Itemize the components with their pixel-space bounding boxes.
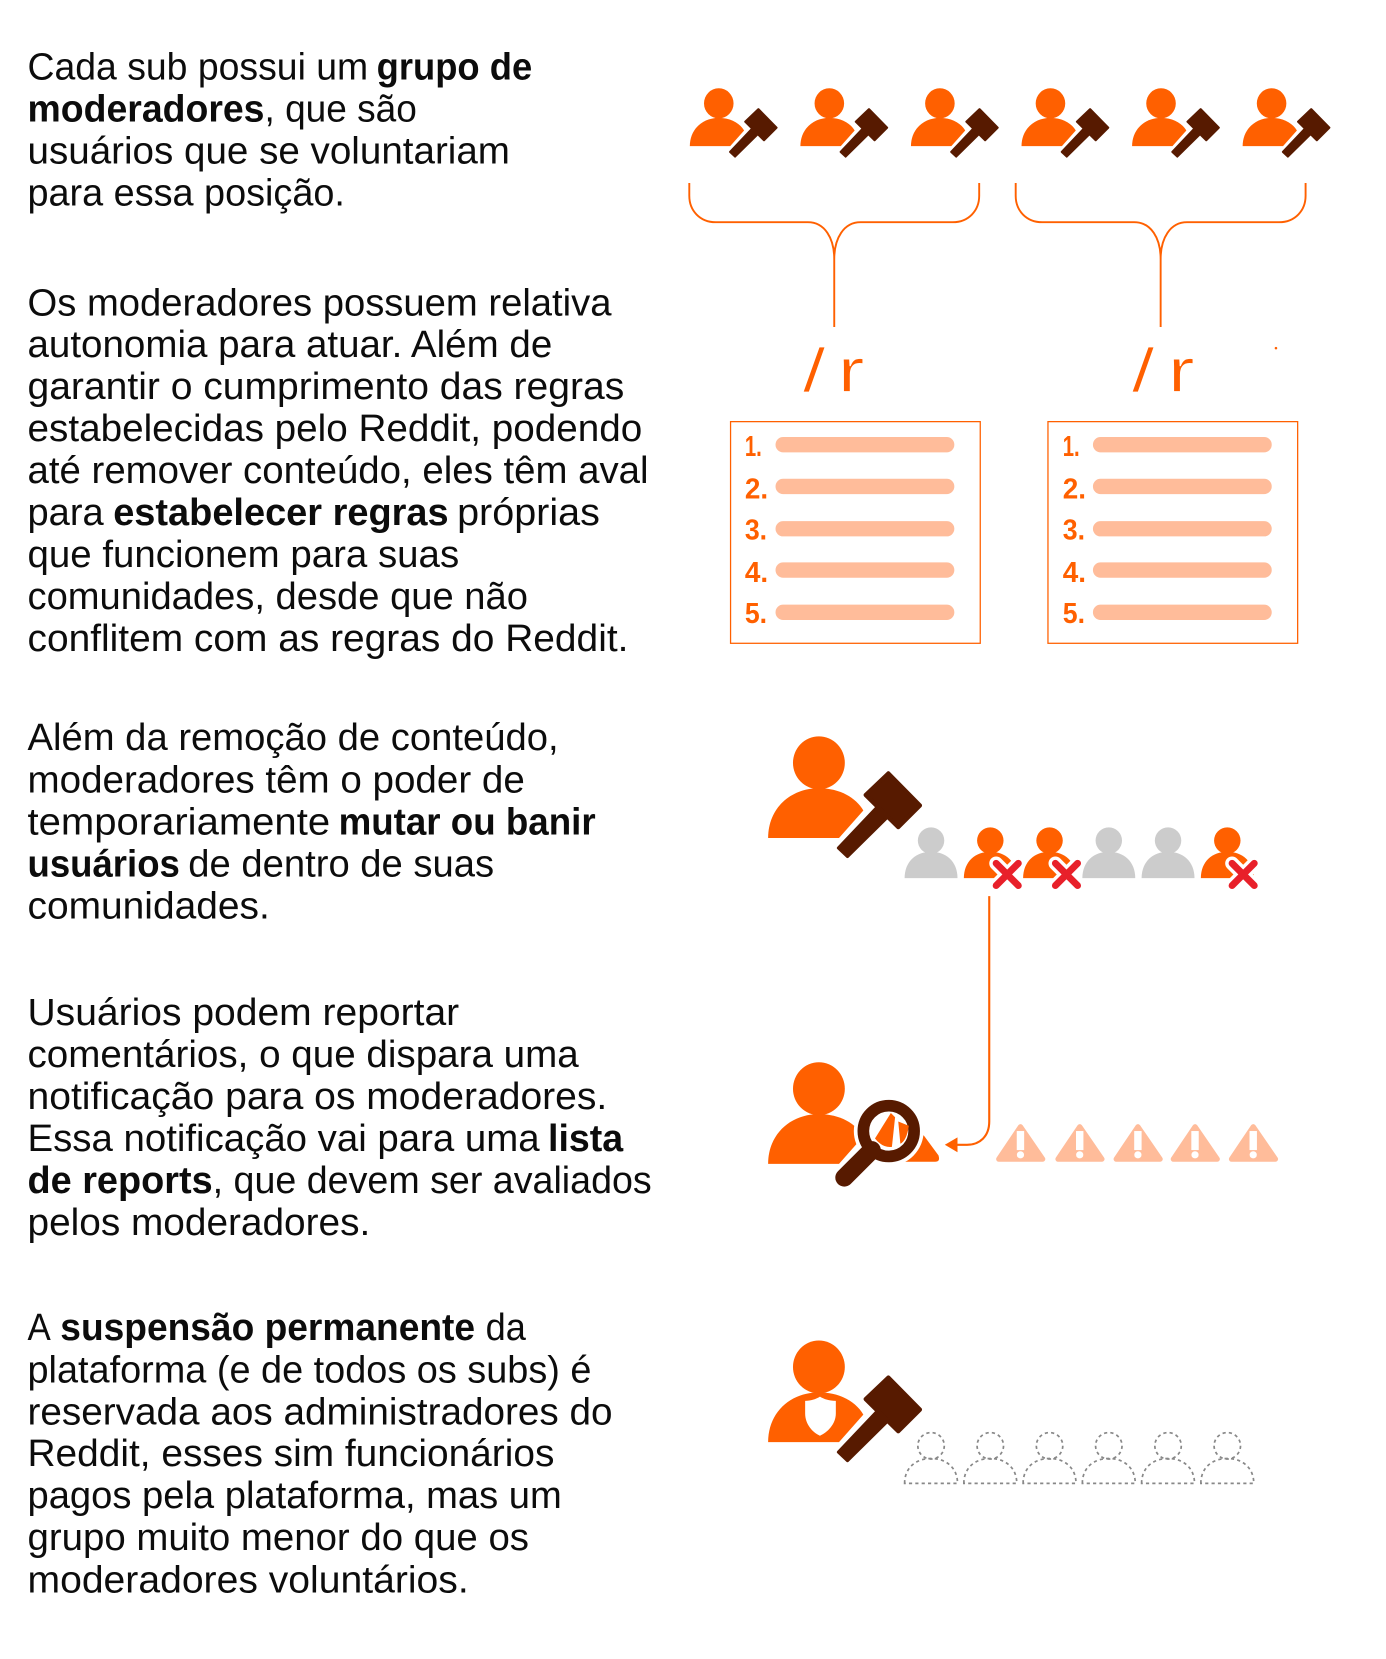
text block: lista de reports: , que devem ser avaliados bbox=[213, 1160, 652, 1202]
icons: report warning triangles bbox=[999, 1127, 1275, 1159]
text block: mutar ou banir: temporariamente bbox=[28, 801, 330, 843]
panel: second rules list: 2. bbox=[1063, 473, 1086, 505]
text block: autonomia dos moderadores bbox=[28, 282, 649, 660]
icon: moderator with gavel bbox=[768, 736, 920, 856]
text block: grupo de moderadores: Cada sub possui um bbox=[28, 46, 368, 88]
icons: user row with muted or banned users bbox=[905, 827, 1254, 886]
text block: lista de reports: de reports bbox=[28, 1160, 213, 1202]
text block: grupo de moderadores: moderadores bbox=[28, 88, 265, 130]
text block: suspensão permanente: reservada aos administradores do bbox=[28, 1391, 613, 1433]
icon: administrator with shield and gavel bbox=[768, 1341, 920, 1461]
panel: first rules list: 4. bbox=[745, 557, 768, 589]
text block: grupo de moderadores: , que são bbox=[265, 88, 417, 130]
text block: mutar ou banir: moderadores têm o poder de bbox=[28, 759, 525, 801]
text block: grupo de moderadores: grupo de bbox=[377, 46, 532, 88]
text block: suspensão permanente: plataforma (e de todos os subs) é bbox=[28, 1349, 591, 1391]
bracket: last three moderators to subreddit bbox=[1016, 183, 1306, 327]
text block: autonomia dos moderadores: para bbox=[28, 492, 105, 534]
bracket: first three moderators to subreddit bbox=[689, 183, 979, 327]
panel: second rules list bbox=[1048, 422, 1298, 643]
label: /r first subreddit: r bbox=[838, 336, 864, 405]
panel: first rules list: 1. bbox=[745, 431, 762, 463]
stray dot bbox=[1275, 347, 1277, 349]
icons: row of six moderators with gavels bbox=[690, 88, 1329, 157]
text block: mutar ou banir: Além da remoção de conteúdo, bbox=[28, 717, 559, 759]
panel: second rules list: 4. bbox=[1063, 557, 1086, 589]
label: /r second subreddit: r bbox=[1168, 336, 1194, 405]
text block: lista de reports: Essa notificação vai para uma bbox=[28, 1118, 540, 1160]
text block: suspensão permanente: grupo muito menor do que os bbox=[28, 1517, 529, 1559]
icon: moderator with magnifier reviewing report bbox=[768, 1062, 939, 1179]
text block: suspensão permanente: A bbox=[28, 1307, 51, 1349]
icons: row of suspended users, dashed outlines bbox=[905, 1433, 1254, 1483]
text block: mutar ou banir: de dentro de suas bbox=[188, 844, 494, 886]
text block: lista de reports: notificação para os moderadores. bbox=[28, 1076, 607, 1118]
text block: autonomia dos moderadores: garantir o cumprimento das regras bbox=[28, 366, 624, 408]
text block: suspensão permanente: da bbox=[486, 1307, 527, 1349]
text block: grupo de moderadores: para essa posição. bbox=[28, 172, 345, 214]
text block: autonomia dos moderadores: que funcionem para suas bbox=[28, 534, 459, 576]
label: /r first subreddit bbox=[803, 336, 864, 405]
panel: first rules list: 2. bbox=[745, 473, 768, 505]
panel: first rules list bbox=[731, 422, 980, 643]
panel: first rules list: 3. bbox=[745, 515, 767, 547]
text block: mutar ou banir bbox=[28, 717, 596, 927]
text block: suspensão permanente: pagos pela plataforma, mas um bbox=[28, 1475, 562, 1517]
text block: autonomia dos moderadores: próprias bbox=[457, 492, 600, 534]
text block: lista de reports: lista bbox=[548, 1118, 624, 1160]
panel: second rules list: 1. bbox=[1063, 431, 1080, 463]
text block: grupo de moderadores bbox=[28, 46, 532, 214]
text block: autonomia dos moderadores: comunidades, desde que não bbox=[28, 576, 528, 618]
arrow: banned user to report list bbox=[945, 896, 989, 1152]
text block: autonomia dos moderadores: autonomia para atuar. Além de bbox=[28, 324, 552, 366]
text block: lista de reports: comentários, o que dispara uma bbox=[28, 1034, 580, 1076]
text block: autonomia dos moderadores: estabelecidas pelo Reddit, podendo bbox=[28, 408, 642, 450]
text block: suspensão permanente: moderadores voluntários. bbox=[28, 1559, 469, 1601]
text block: suspensão permanente: suspensão permanente bbox=[60, 1307, 475, 1349]
text block: lista de reports bbox=[28, 992, 652, 1244]
text block: lista de reports: Usuários podem reportar bbox=[28, 992, 459, 1034]
text block: mutar ou banir: mutar ou banir bbox=[339, 801, 596, 843]
label: /r second subreddit: / bbox=[1132, 336, 1156, 405]
text block: autonomia dos moderadores: até remover conteúdo, eles têm aval bbox=[28, 450, 649, 492]
text block: autonomia dos moderadores: Os moderadores possuem relativa bbox=[28, 282, 612, 324]
label: /r second subreddit bbox=[1132, 336, 1194, 405]
panel: second rules list: 5. bbox=[1063, 598, 1085, 630]
text block: autonomia dos moderadores: estabelecer regras bbox=[113, 492, 449, 534]
panel: first rules list: 5. bbox=[745, 598, 767, 630]
label: /r first subreddit: / bbox=[803, 336, 826, 405]
text block: mutar ou banir: usuários bbox=[28, 844, 180, 886]
text block: suspensão permanente: Reddit, esses sim funcionários bbox=[28, 1433, 554, 1475]
text block: autonomia dos moderadores: conflitem com as regras do Reddit. bbox=[28, 618, 628, 660]
text block: grupo de moderadores: usuários que se voluntariam bbox=[28, 130, 510, 172]
text block: suspensão permanente bbox=[28, 1307, 613, 1601]
text block: lista de reports: pelos moderadores. bbox=[28, 1202, 370, 1244]
text block: mutar ou banir: comunidades. bbox=[28, 885, 270, 927]
panel: second rules list: 3. bbox=[1063, 515, 1085, 547]
